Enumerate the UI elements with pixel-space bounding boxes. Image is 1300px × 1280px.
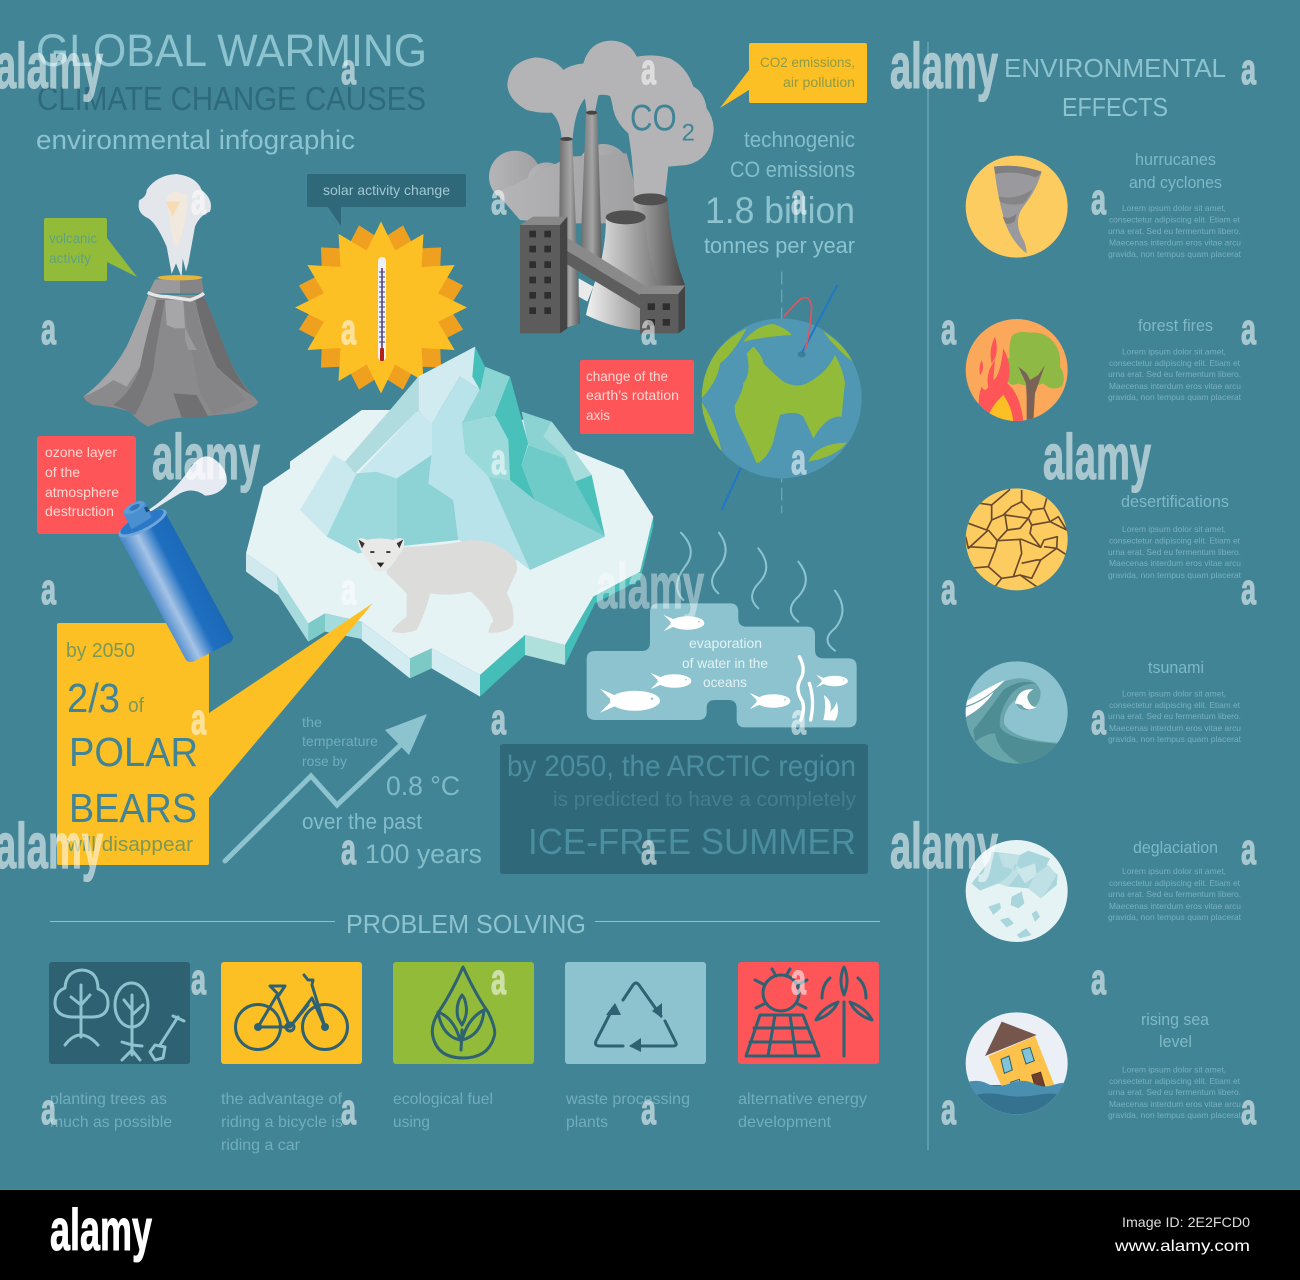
watermarks: a (491, 175, 506, 224)
effect: hurricanes and cyclones: hurrucanes (1135, 150, 1216, 169)
icon: ocean evaporation (587, 533, 857, 727)
effect: deglaciation: Maecenas interdum eros vitae arcu (1109, 901, 1241, 911)
effect: deglaciation: gravida, non tempus quam placerat (1108, 912, 1242, 922)
watermarks: a (941, 305, 956, 354)
callout: solar activity change (307, 174, 466, 226)
effect: rising sea level: Maecenas interdum eros vitae arcu (1109, 1099, 1241, 1109)
panel: ecological fuel: ecological fuel (393, 1091, 493, 1108)
callout: arctic ice-free summer (500, 744, 868, 874)
callout: ozone layer destruction: of the (45, 464, 80, 480)
watermarks: a (191, 175, 206, 224)
watermarks: alamy (596, 550, 704, 622)
watermarks: a (341, 305, 356, 354)
icon: cracked earth (966, 488, 1068, 590)
callout: change of the earth's rotation axis: change of the (586, 368, 668, 384)
effect: forest fires: urna erat. Sed eu fermentum libero. (1108, 369, 1241, 379)
effect: desertifications: desertifications (1121, 492, 1229, 511)
icon: sun with thermometer (277, 203, 485, 412)
chart: temperature arrow (225, 714, 482, 869)
chart: temperature arrow: 100 years (365, 839, 482, 869)
panel: waste processing (565, 962, 706, 1131)
watermarks: alamy (0, 30, 103, 102)
effect: deglaciation: urna erat. Sed eu fermentum libero. (1108, 889, 1241, 899)
watermarks: a (641, 825, 656, 874)
chart: temperature arrow: rose by (302, 753, 347, 769)
title block: CLIMATE CHANGE CAUSES (37, 80, 426, 117)
icon: melting ice (966, 840, 1068, 942)
panel: waste processing: plants (566, 1114, 608, 1131)
callout: polar bears stat (57, 603, 373, 865)
effect: forest fires: Maecenas interdum eros vitae arcu (1109, 381, 1241, 391)
effect: forest fires (966, 316, 1242, 422)
icon: wave (963, 661, 1070, 770)
watermarks: alamy (1043, 421, 1151, 493)
effect: desertifications: Lorem ipsum dolor sit amet, (1122, 524, 1226, 534)
watermarks: a (791, 695, 806, 744)
watermarks: a (491, 955, 506, 1004)
panel: planting trees: planting trees as (50, 1091, 167, 1108)
icon: ocean evaporation: evaporation (689, 635, 762, 651)
effect: hurricanes and cyclones: Maecenas interdum eros vitae arcu (1109, 238, 1241, 248)
watermarks: a (1241, 1085, 1256, 1134)
watermarks: a (1091, 695, 1106, 744)
callout: ozone layer destruction: ozone layer (45, 444, 117, 460)
effect: hurricanes and cyclones: gravida, non tempus quam placerat (1108, 249, 1242, 259)
effect: desertifications: consectetur adipiscing elit. Etiam et (1109, 536, 1241, 546)
ice mountain (300, 347, 605, 570)
ice floe surface (246, 410, 653, 675)
callout: CO2 emissions: air pollution (783, 74, 855, 90)
title block: environmental infographic (36, 125, 355, 155)
panel: bicycle (221, 962, 362, 1154)
effect: forest fires: forest fires (1138, 316, 1213, 335)
panel: bicycle: riding a car (221, 1137, 301, 1154)
effect: tsunami: gravida, non tempus quam placerat (1108, 734, 1242, 744)
watermarks: a (641, 45, 656, 94)
chart: temperature arrow: temperature (302, 733, 378, 749)
watermarks: a (1241, 565, 1256, 614)
panel: planting trees: much as possible (50, 1114, 172, 1131)
title block: GLOBAL WARMING (36, 25, 427, 76)
icon: factory with CO2 smoke (489, 41, 714, 333)
effect: forest fires: gravida, non tempus quam placerat (1108, 392, 1242, 402)
watermarks: alamy (152, 421, 260, 493)
effect: hurricanes and cyclones: and cyclones (1129, 173, 1222, 192)
panel: alternative energy (738, 962, 879, 1131)
callout: ozone layer destruction: destruction (45, 503, 114, 519)
effect: hurricanes and cyclones: consectetur adipiscing elit. Etiam et (1109, 214, 1241, 224)
watermarks: a (341, 1085, 356, 1134)
heading: problem solving: PROBLEM SOLVING (346, 909, 586, 939)
watermarks: a (791, 955, 806, 1004)
panel: waste processing: waste processing (565, 1091, 690, 1108)
watermarks: a (191, 955, 206, 1004)
callout: volcanic activity: activity (49, 250, 91, 266)
watermarks: a (941, 1085, 956, 1134)
callout: change of the earth's rotation axis (580, 360, 694, 434)
watermarks: a (791, 435, 806, 484)
icon: tree and flames (966, 319, 1068, 422)
effect: forest fires: consectetur adipiscing elit. Etiam et (1109, 358, 1241, 368)
effect: hurricanes and cyclones (966, 150, 1242, 259)
footer bar: alamy (50, 1198, 152, 1263)
watermarks: alamy (0, 810, 103, 882)
effect: desertifications: Maecenas interdum eros vitae arcu (1109, 558, 1241, 568)
effect: tsunami: consectetur adipiscing elit. Etiam et (1109, 700, 1241, 710)
icon: flooded house (963, 1012, 1070, 1118)
watermarks: alamy (890, 30, 998, 102)
stat: technogenic emissions: 1.8 billion (705, 190, 855, 231)
effect: tsunami: urna erat. Sed eu fermentum libero. (1108, 711, 1241, 721)
callout: ozone layer destruction (37, 436, 136, 534)
watermarks: a (1241, 305, 1256, 354)
panel: ecological fuel (393, 962, 534, 1131)
callout: solar activity change: solar activity change (323, 182, 450, 198)
watermarks: a (791, 175, 806, 224)
callout: arctic ice-free summer: ICE-FREE SUMMER (528, 821, 856, 862)
callout: CO2 emissions (720, 43, 867, 108)
effect: deglaciation: Lorem ipsum dolor sit amet, (1122, 866, 1226, 876)
icon: earth globe with axis (700, 272, 862, 513)
callout: arctic ice-free summer: by 2050, the ARCTIC region (507, 750, 856, 783)
stat: technogenic emissions (704, 127, 855, 258)
effect: hurricanes and cyclones: Lorem ipsum dolor sit amet, (1122, 203, 1226, 213)
effect: tsunami (963, 658, 1242, 770)
effect: rising sea level: rising sea (1141, 1010, 1210, 1029)
callout: volcanic activity (44, 218, 137, 281)
effect: desertifications: gravida, non tempus quam placerat (1108, 570, 1242, 580)
panel: alternative energy: development (738, 1114, 832, 1131)
callout: CO2 emissions: CO2 emissions, (760, 54, 855, 70)
callout: polar bears stat: BEARS (69, 785, 197, 831)
icon: spray can (115, 456, 233, 662)
callout: volcanic activity: volcanic (49, 230, 97, 246)
heading: environmental effects: EFFECTS (1062, 92, 1168, 122)
iceberg illustration with polar bear (246, 347, 653, 697)
upper smoke (507, 41, 714, 197)
watermarks: a (341, 45, 356, 94)
icon: tornado (966, 156, 1068, 258)
effect: rising sea level: consectetur adipiscing elit. Etiam et (1109, 1076, 1241, 1086)
effect: deglaciation: consectetur adipiscing elit. Etiam et (1109, 878, 1241, 888)
chart: temperature arrow: the (302, 714, 322, 730)
callout: ozone layer destruction: atmosphere (45, 484, 119, 500)
icon: factory with CO2 smoke: CO (630, 97, 677, 139)
chart: temperature arrow: 0.8 °C (386, 771, 460, 801)
watermarks: a (491, 695, 506, 744)
callout: polar bears stat: POLAR (69, 729, 198, 775)
watermarks: a (41, 305, 56, 354)
heading: environmental effects: ENVIRONMENTAL (1004, 53, 1226, 83)
watermarks: a (1091, 175, 1106, 224)
watermarks: a (341, 825, 356, 874)
effect: deglaciation: deglaciation (1133, 838, 1218, 857)
callout: polar bears stat: will disappear (66, 834, 193, 856)
watermarks: a (1241, 45, 1256, 94)
effect: deglaciation (966, 838, 1242, 942)
stat: technogenic emissions: technogenic (744, 127, 855, 152)
watermarks: a (941, 565, 956, 614)
watermarks: a (641, 305, 656, 354)
callout: polar bears stat: of (128, 695, 144, 717)
watermarks: a (1241, 825, 1256, 874)
effect: hurricanes and cyclones: urna erat. Sed eu fermentum libero. (1108, 226, 1241, 236)
watermarks: a (491, 435, 506, 484)
panel: ecological fuel: using (393, 1114, 430, 1131)
effect: rising sea level: gravida, non tempus quam placerat (1108, 1110, 1242, 1120)
panel: alternative energy: alternative energy (738, 1091, 867, 1108)
effect: rising sea level: urna erat. Sed eu fermentum libero. (1108, 1087, 1241, 1097)
effect: tsunami: Lorem ipsum dolor sit amet, (1122, 688, 1226, 698)
watermarks: a (341, 565, 356, 614)
effect: rising sea level: level (1159, 1032, 1192, 1051)
panel: bicycle: the advantage of (221, 1091, 343, 1108)
footer bar: www.alamy.com (1114, 1238, 1250, 1255)
watermarks: a (191, 695, 206, 744)
callout: change of the earth's rotation axis: axis (586, 407, 610, 423)
icon: volcano (83, 174, 258, 427)
effect: desertifications: urna erat. Sed eu fermentum libero. (1108, 547, 1241, 557)
watermarks: a (41, 1085, 56, 1134)
stat: technogenic emissions: CO emissions (730, 157, 855, 182)
icon: ocean evaporation: oceans (703, 674, 747, 690)
effect: rising sea level: Lorem ipsum dolor sit amet, (1122, 1064, 1226, 1074)
effect: forest fires: Lorem ipsum dolor sit amet, (1122, 346, 1226, 356)
heading: environmental effects (1004, 53, 1226, 122)
effect: desertifications (966, 488, 1242, 590)
callout: polar bears stat: by 2050 (66, 640, 135, 662)
icon: ocean evaporation: of water in the (682, 655, 768, 671)
icon: factory with CO2 smoke: 2 (682, 120, 695, 147)
effect: tsunami: Maecenas interdum eros vitae arcu (1109, 723, 1241, 733)
footer bar: Image ID: 2E2FCD0 (1122, 1214, 1250, 1230)
lower smoke (489, 144, 640, 223)
effect: tsunami: tsunami (1148, 658, 1204, 677)
effect: rising sea level (963, 1010, 1242, 1120)
watermarks: a (641, 1085, 656, 1134)
panel: bicycle: riding a bicycle is (221, 1114, 343, 1131)
watermarks: a (1091, 955, 1106, 1004)
panel: planting trees (49, 962, 190, 1131)
watermarks: a (41, 565, 56, 614)
chart: temperature arrow: over the past (302, 809, 422, 834)
stat: technogenic emissions: tonnes per year (704, 233, 855, 258)
divider (927, 42, 929, 1150)
callout: change of the earth's rotation axis: earth's rotation (586, 387, 679, 403)
watermarks: alamy (890, 810, 998, 882)
title block (36, 25, 427, 155)
callout: arctic ice-free summer: is predicted to have a completely (553, 789, 856, 811)
callout: polar bears stat: 2/3 (67, 675, 120, 721)
footer bar (0, 1187, 1300, 1280)
icon: polar bear (357, 538, 517, 633)
